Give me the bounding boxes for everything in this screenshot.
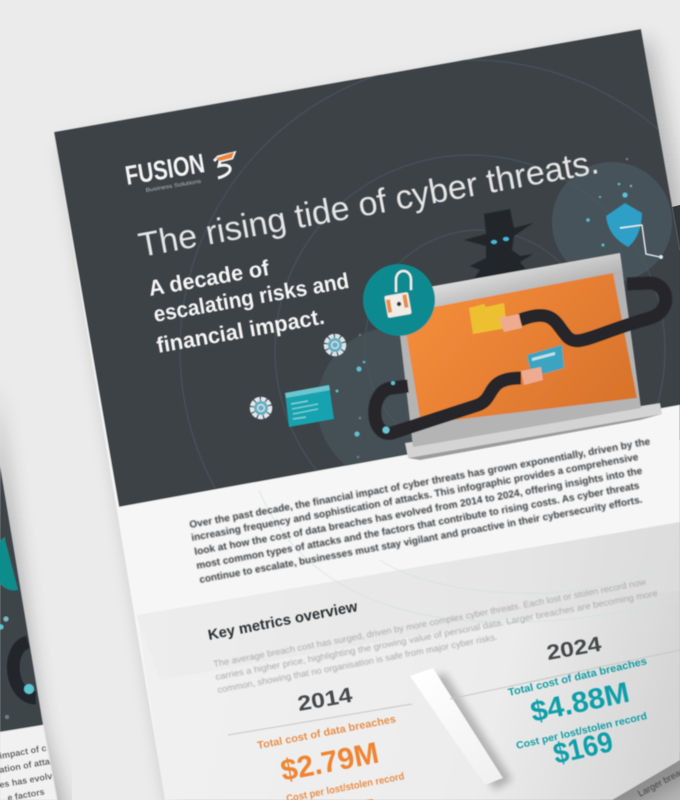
year 2014: 2014 xyxy=(296,684,354,716)
label: total cost 2014: Total cost of data breaches xyxy=(256,713,397,752)
text block: metrics description: The average breach cost has surged, driven by more complex cyber threats. Each lost or stolen record now xyxy=(213,577,647,669)
label: total cost 2024: Total cost of data breaches xyxy=(507,655,648,699)
panel: back page left: impact of c xyxy=(0,743,47,761)
icon: gear lower xyxy=(252,399,270,417)
value: 4.88M: $4.88M xyxy=(528,677,632,729)
icon: gear upper xyxy=(326,336,344,354)
column: 2014 metrics xyxy=(228,684,412,800)
icon: data card xyxy=(527,345,564,377)
label: cost per record 2024: Cost per lost/stolen record xyxy=(515,711,648,752)
heading: key metrics overview: Key metrics overview xyxy=(207,599,360,644)
text block: metrics description: carries a higher price, highlighting the growing value of personal data. Larger breaches are becoming more xyxy=(215,588,659,682)
subtitle: A decade of xyxy=(147,255,272,301)
panel: dark header xyxy=(54,28,680,508)
icon: hacker xyxy=(464,209,533,284)
value: 169: $169 xyxy=(550,726,616,771)
title: The rising tide of cyber threats. xyxy=(136,143,602,265)
panel: back page left: ation of atta xyxy=(0,756,52,775)
text block: metrics description: common, showing that no organisation is safe from major cyber risks. xyxy=(217,632,498,695)
subtitle xyxy=(147,255,351,358)
logo: Business Solutions xyxy=(145,179,202,194)
text block: introduction: Over the past decade, the financial impact of cyber threats has grown exponentially, driven by the xyxy=(189,436,651,531)
illustration: hacker with laptop xyxy=(252,158,666,460)
subtitle: escalating risks and xyxy=(152,268,351,327)
panel: metrics background xyxy=(137,522,680,800)
faint rings on paper xyxy=(258,490,604,623)
arrow: top cable with hand xyxy=(520,283,666,341)
subtitle: financial impact. xyxy=(155,304,326,358)
column: 2024 metrics xyxy=(450,633,680,771)
panel: back page left xyxy=(0,380,68,800)
text block: introduction xyxy=(189,436,651,586)
arrow: bottom cable with hand xyxy=(375,378,521,433)
text block: introduction: look at how the cost of data breaches has evolved from 2014 to 2024, offering insights into the xyxy=(194,466,644,558)
icon: open padlock badge xyxy=(363,264,435,336)
panel: back page left: es has evolv xyxy=(0,771,53,790)
divider bar xyxy=(410,668,512,790)
year 2024: 2024 xyxy=(545,633,603,665)
panel: back page right xyxy=(600,205,680,800)
text block: metrics description xyxy=(213,577,659,695)
text block: introduction: continue to escalate, businesses must stay vigilant and proactive in their cybersecurity efforts. xyxy=(199,495,644,586)
icon: shield xyxy=(606,203,663,259)
icon: laptop base xyxy=(405,403,662,458)
icon: laptop screen xyxy=(395,253,641,447)
value: 2.79M: $2.79M xyxy=(278,737,382,788)
icon: browser window xyxy=(285,385,334,427)
particles xyxy=(336,158,632,458)
icon: folder xyxy=(469,303,507,334)
text block: introduction: most common types of attacks and the factors that contribute to rising costs. As cyber threats xyxy=(196,481,641,572)
logo: FUSION xyxy=(123,148,207,191)
text block: introduction: increasing frequency and sophistication of attacks. This infographic provides a comprehensive xyxy=(191,452,640,544)
